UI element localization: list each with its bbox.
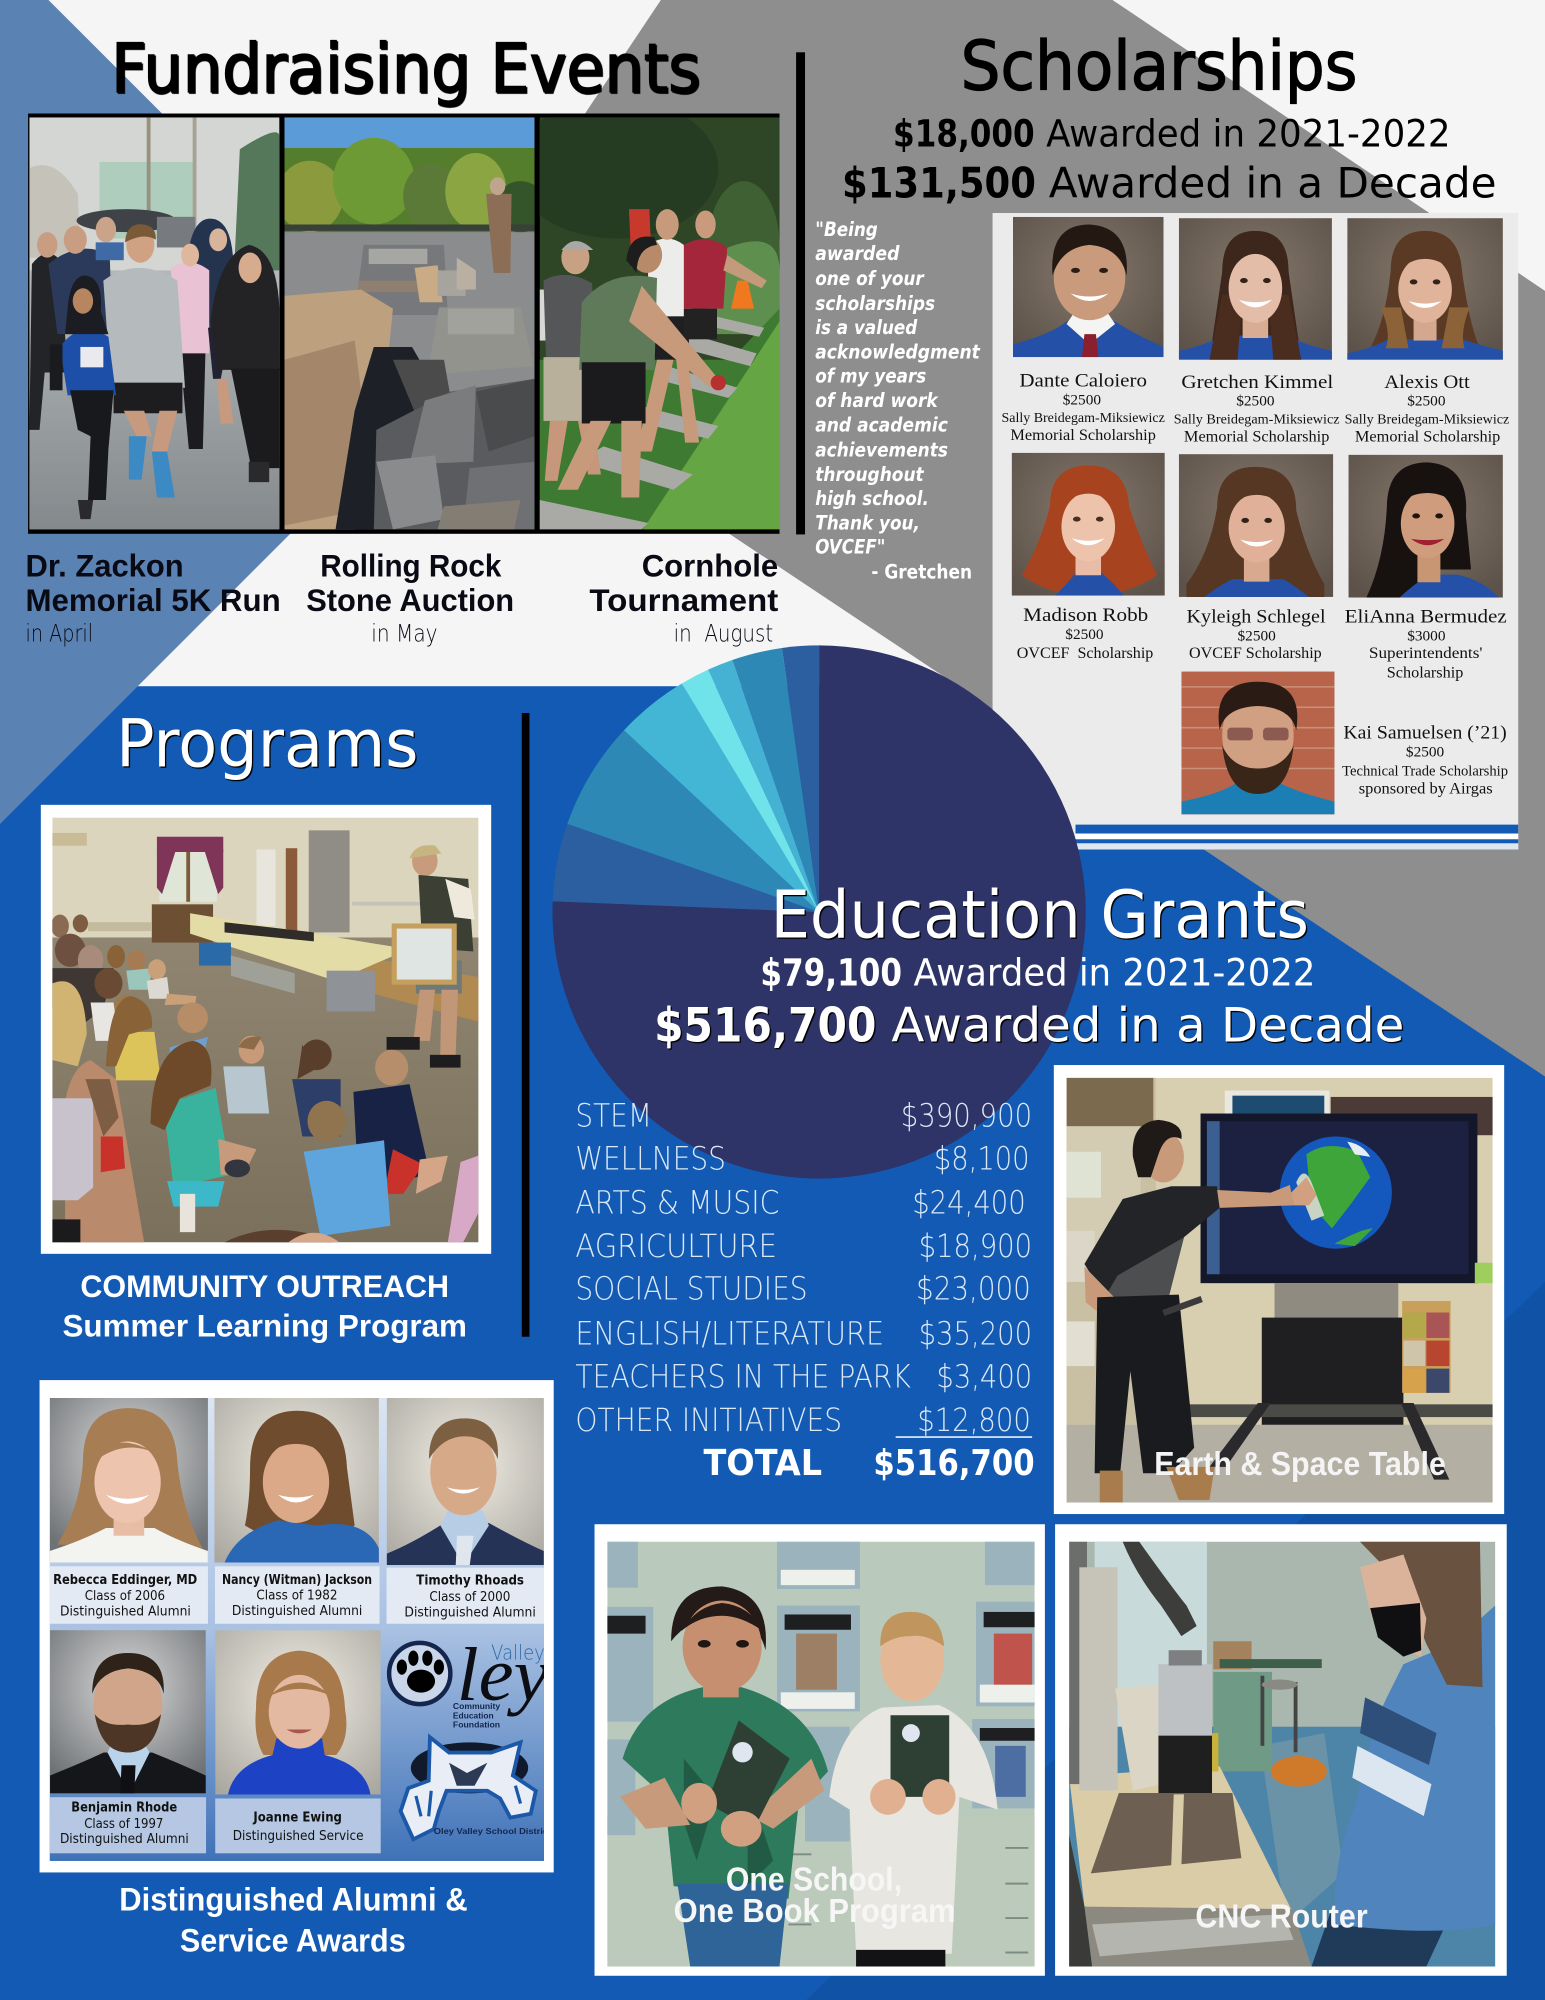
- table: grants by category: TOTAL: [703, 1443, 822, 1484]
- table: grants by category: $8,100: [934, 1140, 1030, 1178]
- table: grants by category: TEACHERS IN THE PARK: [575, 1358, 911, 1396]
- event label: stone auction: Rolling Rock: [320, 548, 502, 584]
- portrait: Kai Samuelsen: [1181, 672, 1334, 814]
- logo: Oley Valley foundation paw: Foundation: [453, 1720, 500, 1730]
- stat: 2021-2022: Awarded in 2021-2022: [1046, 113, 1451, 156]
- scholarship captions row 2: Superintendents': [1369, 645, 1483, 662]
- stat: decade: [842, 159, 1497, 208]
- quote from Gretchen: one of your: [815, 267, 925, 290]
- quote from Gretchen: awarded: [815, 242, 900, 265]
- logos: foundation and school district: [389, 1632, 551, 1839]
- captions row 1: Class of 2006: [85, 1589, 165, 1604]
- portrait: Nancy Jackson: [214, 1398, 379, 1562]
- caption: one school one book: [674, 1861, 956, 1930]
- scholarship captions row 1: Sally Breidegam-Miksiewicz: [1174, 411, 1340, 427]
- caption: distinguished alumni: Distinguished Alumni &: [119, 1882, 468, 1918]
- table: grants by category: ARTS & MUSIC: [575, 1184, 780, 1222]
- photo: one school one book: [595, 1524, 1045, 1976]
- table: grants by category: $390,900: [901, 1096, 1032, 1134]
- panel: fundraising events: [26, 29, 780, 648]
- photo: community outreach: [41, 805, 491, 1254]
- captions row 2: Distinguished Service: [233, 1829, 364, 1844]
- captions row 1: Distinguished Alumni: [404, 1605, 536, 1620]
- scholarship captions row 2: Madison Robb: [1023, 605, 1148, 626]
- caption: community outreach: Summer Learning Program: [63, 1308, 467, 1344]
- quote from Gretchen: of my years: [815, 365, 926, 388]
- table: grants by category: $18,900: [919, 1227, 1032, 1265]
- table: grants by category: $3,400: [936, 1358, 1032, 1396]
- event label: stone auction: [306, 548, 514, 648]
- photo strip: [28, 98, 780, 534]
- caption: CNC router: CNC Router: [1195, 1898, 1368, 1935]
- stat: decade: Awarded in a Decade: [1049, 159, 1497, 208]
- scholarship captions row 2: OVCEF Scholarship: [1017, 645, 1153, 662]
- stat: decade grants: [654, 998, 1404, 1053]
- scholarship captions row 1: Sally Breidegam-Miksiewicz: [1345, 411, 1509, 427]
- photo: rolling rock stone auction: [284, 117, 535, 530]
- captions row 2: Joanne Ewing: [252, 1810, 342, 1825]
- stat: 2021-2022 grants: Awarded in 2021-2022: [913, 951, 1315, 994]
- caption: distinguished alumni: Service Awards: [180, 1923, 406, 1959]
- caption: Kai Samuelsen: [1342, 723, 1508, 797]
- scholarship captions row 1: $2500: [1063, 392, 1101, 408]
- heading: Fundraising Events: Fundraising Events: [111, 29, 700, 108]
- portrait: Benjamin Rhode: [50, 1630, 206, 1794]
- photo: earth and space table: [1054, 1065, 1504, 1514]
- quote from Gretchen: of hard work: [815, 389, 939, 412]
- scholarship captions row 2: $2500: [1238, 628, 1276, 644]
- caption: community outreach: [63, 1268, 467, 1344]
- scholarship captions row 1: Alexis Ott: [1384, 372, 1470, 393]
- scholarship captions row 1: Memorial Scholarship: [1184, 428, 1329, 445]
- event label: cornhole: in August: [674, 620, 773, 648]
- table: grants by category: $12,800: [917, 1401, 1031, 1439]
- logo: Oley Valley foundation paw: Valley: [491, 1640, 545, 1664]
- portrait: Rebecca Eddinger: [50, 1398, 208, 1562]
- scholarship captions row 1: $2500: [1407, 394, 1445, 410]
- quote from Gretchen: and academic: [815, 414, 948, 437]
- captions row 1: Nancy (Witman) Jackson: [222, 1573, 372, 1588]
- quote from Gretchen: high school.: [815, 487, 929, 510]
- scholarship captions row 2: EliAnna Bermudez: [1345, 606, 1507, 627]
- captions row 2: [50, 1797, 381, 1853]
- table: grants by category: AGRICULTURE: [575, 1227, 777, 1265]
- table: grants by category: $516,700: [873, 1443, 1035, 1484]
- photo: 5K runners in the rain: [29, 117, 280, 530]
- table: grants by category: $23,000: [916, 1270, 1031, 1308]
- captions row 1: Rebecca Eddinger, MD: [53, 1573, 197, 1588]
- captions row 2: Class of 1997: [84, 1817, 163, 1832]
- logo: Oley Valley foundation paw: ley: [457, 1632, 549, 1717]
- event label: 5K run: in April: [26, 620, 93, 648]
- caption: Kai Samuelsen: Technical Trade Scholarship: [1342, 764, 1508, 780]
- panel: education grants header: [654, 876, 1404, 1053]
- stat: decade grants: $516,700: [654, 998, 876, 1053]
- portrait: EliAnna Bermudez: [1348, 454, 1503, 598]
- divider bar: programs: [522, 713, 529, 1337]
- table: grants by category: WELLNESS: [575, 1140, 726, 1178]
- logo: wildcat: Oley Valley School District: [434, 1826, 551, 1836]
- captions row 2: Distinguished Alumni: [60, 1832, 189, 1847]
- table: grants by category: $24,400: [912, 1184, 1026, 1222]
- caption: one school one book: One School,: [726, 1861, 902, 1898]
- scholarship captions row 1: Memorial Scholarship: [1010, 427, 1156, 444]
- quote from Gretchen: OVCEF": [815, 536, 885, 559]
- captions row 1: Class of 2000: [429, 1590, 510, 1605]
- scholarship captions row 2: Scholarship: [1387, 664, 1463, 681]
- caption: community outreach: COMMUNITY OUTREACH: [80, 1268, 449, 1304]
- scholarship captions row 2: $2500: [1065, 627, 1104, 643]
- quote from Gretchen: is a valued: [815, 316, 918, 339]
- photo: CNC router: [1055, 1524, 1507, 1976]
- caption: Kai Samuelsen: sponsored by Airgas: [1359, 780, 1493, 797]
- logo: wildcat: [401, 1737, 551, 1839]
- heading: Programs: Programs: [116, 705, 418, 783]
- panel: scholarship recipients: [993, 213, 1518, 849]
- stat: decade: $131,500: [842, 159, 1036, 208]
- scholarship captions row 1: $2500: [1236, 394, 1275, 410]
- captions row 1: Timothy Rhoads: [416, 1574, 524, 1589]
- quote from Gretchen: "Being: [815, 218, 878, 241]
- caption: earth and space table: Earth & Space Table: [1154, 1446, 1446, 1483]
- caption: Kai Samuelsen: $2500: [1406, 744, 1444, 760]
- portrait: Timothy Rhoads: [386, 1398, 544, 1565]
- quote from Gretchen: acknowledgment: [815, 340, 981, 363]
- event label: cornhole: [589, 548, 779, 648]
- scholarship captions row 2: OVCEF Scholarship: [1189, 645, 1322, 662]
- table: grants by category: STEM: [575, 1096, 652, 1134]
- scholarship captions row 2: Kyleigh Schlegel: [1186, 606, 1326, 627]
- portrait: Alexis Ott: [1347, 218, 1503, 360]
- scholarship captions row 1: Sally Breidegam-Miksiewicz: [1002, 410, 1165, 426]
- scholarship captions row 1: Dante Caloiero: [1019, 370, 1147, 391]
- pie chart: education grants by category: [552, 645, 1086, 1179]
- scholarship captions row 1: Gretchen Kimmel: [1181, 372, 1333, 393]
- quote from Gretchen: [815, 218, 981, 583]
- table: grants by category: [575, 1096, 1035, 1484]
- captions row 1: Distinguished Alumni: [232, 1604, 362, 1619]
- quote from Gretchen: scholarships: [815, 292, 935, 315]
- scholarship captions row 2: [1017, 605, 1507, 681]
- event label: cornhole: Tournament: [589, 582, 779, 618]
- portrait: Dante Caloiero: [1013, 216, 1164, 358]
- table: grants by category: ENGLISH/LITERATURE: [575, 1314, 884, 1352]
- portrait: Kyleigh Schlegel: [1178, 454, 1334, 597]
- event label: 5K run: Dr. Zackon: [26, 548, 184, 584]
- portrait: Joanne Ewing: [215, 1630, 381, 1794]
- scholarship captions row 1: [1002, 370, 1509, 445]
- stat: 2021-2022: $18,000: [893, 113, 1035, 156]
- captions row 1: Class of 1982: [256, 1588, 337, 1603]
- stat: 2021-2022 grants: $79,100: [760, 951, 902, 994]
- quote from Gretchen: - Gretchen: [871, 560, 972, 583]
- quote from Gretchen: throughout: [815, 463, 925, 486]
- heading: Education Grants: Education Grants: [771, 876, 1309, 953]
- scholarship captions row 2: $3000: [1407, 628, 1445, 644]
- caption: one school one book: One Book Program: [674, 1893, 956, 1930]
- logo: Oley Valley foundation paw: [386, 1640, 544, 1728]
- photo: cornhole tournament: [540, 117, 780, 530]
- captions row 2: Benjamin Rhode: [71, 1801, 177, 1816]
- table: grants by category: OTHER INITIATIVES: [575, 1401, 842, 1439]
- event label: 5K run: Memorial 5K Run: [26, 582, 281, 618]
- caption: distinguished alumni: [119, 1882, 468, 1959]
- caption: Kai Samuelsen: Kai Samuelsen (’21): [1343, 723, 1507, 744]
- logo: Oley Valley foundation paw: Community: [453, 1701, 501, 1711]
- heading: Scholarships: Scholarships: [961, 26, 1357, 105]
- table: grants by category: SOCIAL STUDIES: [575, 1270, 808, 1308]
- table: grants by category: $35,200: [919, 1314, 1032, 1352]
- logo: Oley Valley foundation paw: Education: [453, 1711, 494, 1721]
- quote from Gretchen: Thank you,: [815, 511, 920, 534]
- portrait: Gretchen Kimmel: [1178, 218, 1332, 360]
- divider bar: top: [796, 52, 805, 534]
- event label: stone auction: Stone Auction: [306, 582, 514, 618]
- captions row 1: [50, 1566, 544, 1624]
- quote from Gretchen: achievements: [815, 439, 948, 462]
- panel: distinguished alumni: [40, 1380, 554, 1872]
- event label: 5K run: [26, 548, 281, 648]
- event label: cornhole: Cornhole: [642, 548, 778, 584]
- captions row 1: Distinguished Alumni: [60, 1605, 191, 1620]
- panel: scholarships header: [842, 26, 1497, 208]
- event label: stone auction: in May: [371, 620, 438, 648]
- portrait: Madison Robb: [1012, 452, 1165, 596]
- scholarship captions row 1: Memorial Scholarship: [1355, 428, 1500, 445]
- stat: decade grants: Awarded in a Decade: [891, 998, 1404, 1053]
